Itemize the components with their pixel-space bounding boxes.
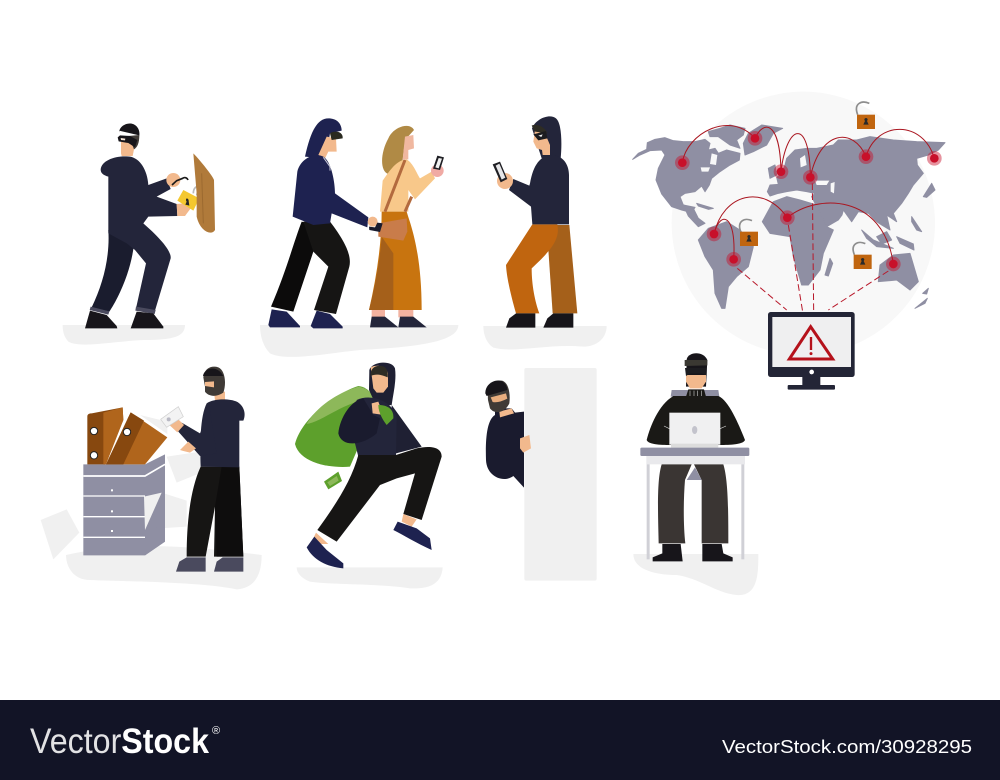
dashed links to monitor: [737, 183, 888, 312]
image reference: VectorStock.com/30928295: [722, 737, 972, 757]
ground shadow 3: [483, 326, 607, 349]
icon: open padlock top: [856, 102, 875, 129]
icon: falling banknote: [324, 472, 342, 489]
brand logo: VectorStock: [30, 722, 209, 761]
ground shadow 1: [63, 325, 185, 345]
registered mark: ®: [212, 725, 220, 737]
figures: top-left burglar and pickpocket: [63, 118, 458, 357]
figures: bottom-left filing cabinet and running thief: [41, 363, 443, 589]
loose papers: [41, 452, 201, 559]
monitor with warning: [768, 312, 855, 390]
seas and lakes cut-outs: [701, 153, 835, 193]
ground shadow 6: [633, 554, 758, 595]
burglar picking padlock: [85, 123, 215, 328]
grey wall panel: [524, 368, 597, 581]
footer bar: [0, 700, 1000, 780]
ground shadow 2: [260, 325, 458, 357]
figure: hooded thief with phone: [483, 116, 607, 349]
icon: open padlock left: [740, 219, 758, 246]
hacker at laptop: [640, 353, 749, 561]
attack arcs: [682, 126, 934, 264]
peeking thief: [485, 380, 531, 488]
thief rummaging: [161, 367, 245, 572]
pickpocket in navy hoodie: [268, 118, 378, 328]
network nodes: [675, 131, 942, 271]
figures: peeking thief and hacker at desk: [485, 353, 758, 595]
filing cabinet: [83, 454, 165, 555]
woman with phone: [369, 126, 444, 327]
background circle: [672, 92, 935, 355]
world map panel: [633, 92, 945, 390]
icon: open padlock right: [853, 242, 872, 269]
ground shadow 5: [297, 567, 443, 588]
folders: [87, 407, 167, 464]
world map landmasses: [633, 125, 945, 308]
running thief with green sack: [295, 363, 442, 568]
ground shadow 4: [66, 546, 262, 589]
icon: warning triangle: [789, 327, 833, 359]
